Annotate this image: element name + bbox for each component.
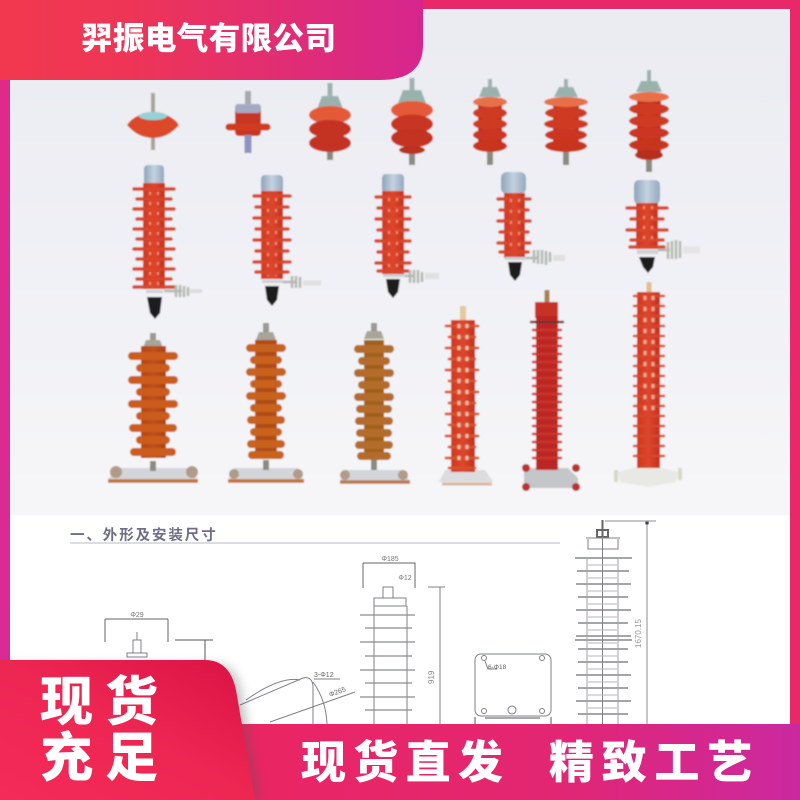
slogan right: 精致工艺 xyxy=(549,737,760,788)
arrester 2-4 xyxy=(498,172,565,281)
frame: top strip xyxy=(415,0,800,9)
drawing: medium arrester: 919 xyxy=(427,670,436,684)
section heading: 一、外形及安装尺寸 xyxy=(70,527,218,544)
arrester 3-6 xyxy=(616,282,680,487)
frame: right strip xyxy=(790,0,800,730)
row 2: arresters with blue-grey caps xyxy=(134,165,700,319)
corner tag xyxy=(0,660,255,800)
arrester 1-5 xyxy=(473,79,507,165)
arrester 1-4 xyxy=(391,78,433,165)
arrester 2-1 xyxy=(134,165,202,319)
drawing: base plate xyxy=(475,654,551,724)
header banner xyxy=(0,0,423,80)
arrester 3-4 xyxy=(439,306,493,484)
arrester 2-5 xyxy=(627,180,700,273)
arrester 3-3 xyxy=(340,323,410,482)
tag text line 2: 充足 xyxy=(40,729,170,788)
company name: 羿振电气有限公司 xyxy=(81,20,336,56)
row 1: small arresters xyxy=(127,70,669,172)
drawing: small arrester: Φ29 xyxy=(130,612,144,619)
drawing: tall arrester xyxy=(575,520,656,724)
drawing: medium arrester: Φ12 xyxy=(398,575,412,582)
arrester 2-2 xyxy=(254,175,321,306)
drawing: medium arrester xyxy=(360,556,445,724)
arrester 1-6 xyxy=(544,79,588,165)
tag text line 1: 现货 xyxy=(40,673,170,732)
arrester 3-2 xyxy=(228,323,304,481)
corner tag shadow xyxy=(6,664,260,800)
drawing: base plate: 6-Φ18 xyxy=(488,664,507,671)
slogan left: 现货直发 xyxy=(301,737,510,788)
drawing: small arrester: Φ265 xyxy=(328,686,347,699)
drawing: small arrester xyxy=(105,612,355,724)
product photo panel xyxy=(10,10,790,515)
frame: left strip xyxy=(0,75,10,665)
dimension drawing panel xyxy=(70,520,656,724)
drawing: small arrester: 3-Φ12 xyxy=(314,672,334,679)
row 3: station-class arresters on base plates xyxy=(108,282,680,491)
arrester 3-5 xyxy=(522,290,580,491)
bottom banner xyxy=(240,724,800,800)
arrester 1-2 xyxy=(229,91,267,153)
arrester 3-1 xyxy=(108,333,198,481)
drawing: medium arrester: Φ185 xyxy=(381,556,399,563)
arrester 1-7 xyxy=(629,70,669,172)
arrester 2-3 xyxy=(376,174,439,298)
arrester 1-1 xyxy=(127,93,179,150)
drawing: tall arrester: 1670.15 xyxy=(634,619,643,648)
arrester 1-3 xyxy=(309,83,351,160)
